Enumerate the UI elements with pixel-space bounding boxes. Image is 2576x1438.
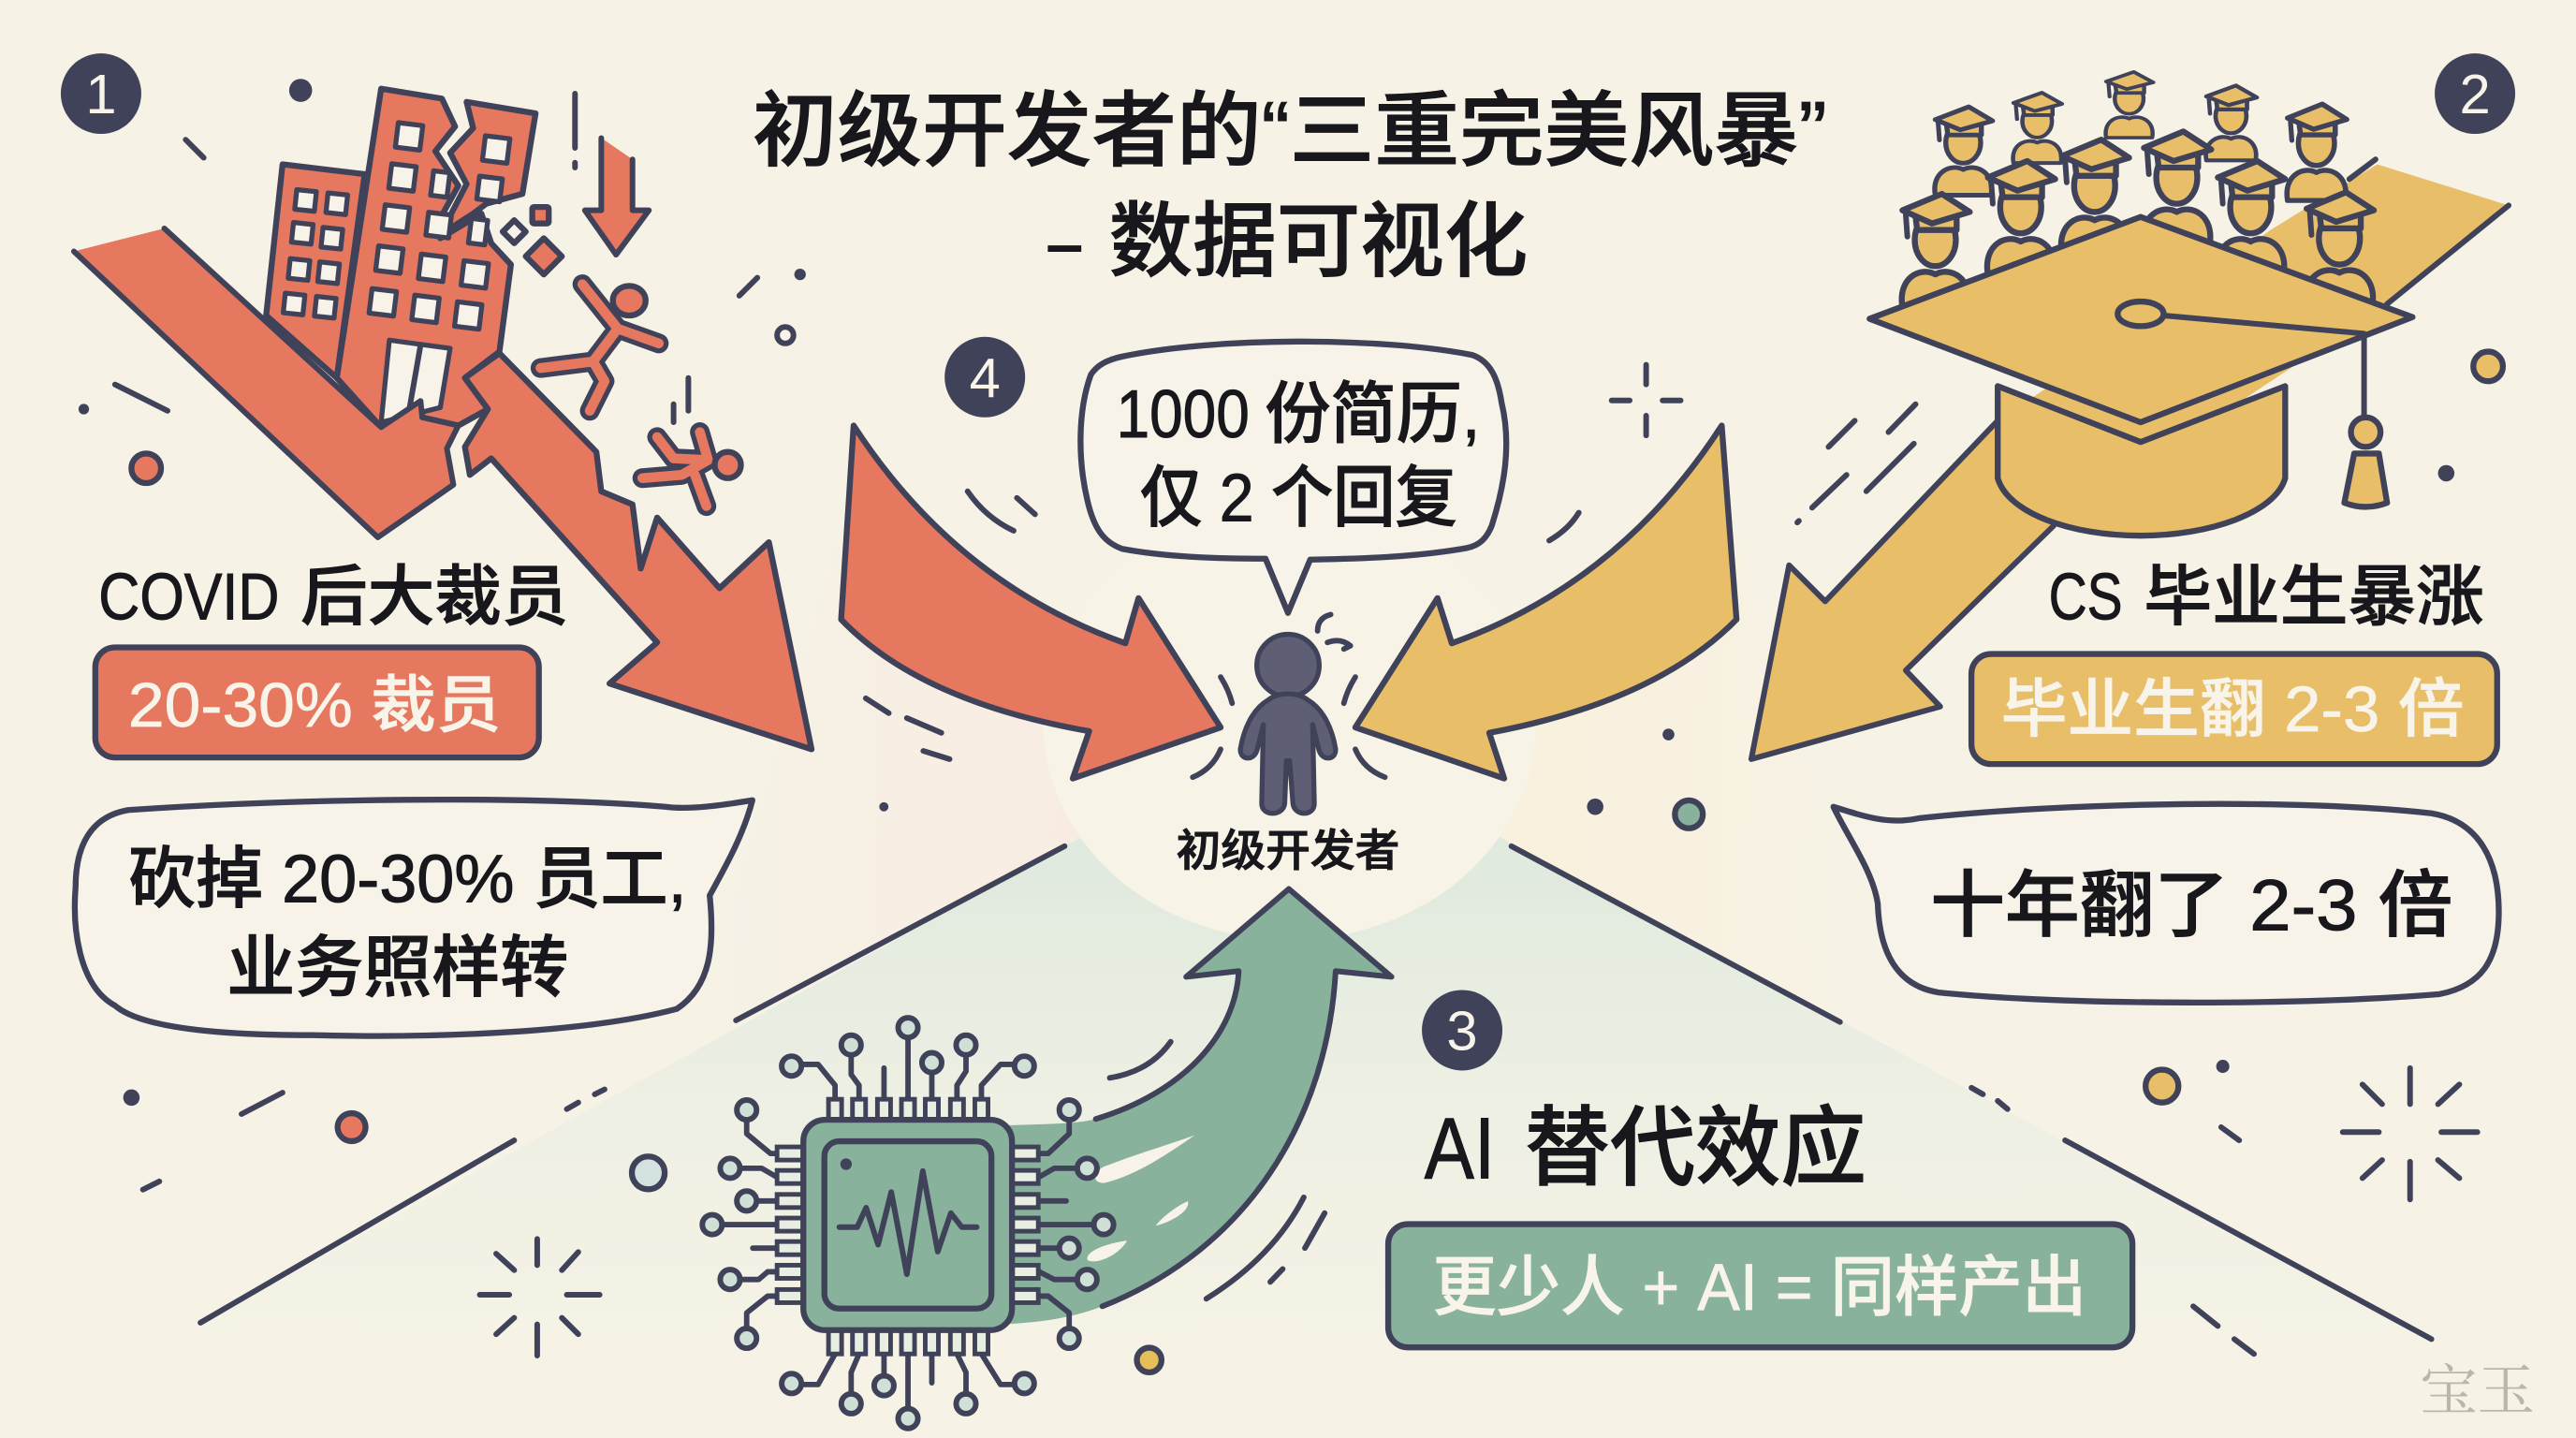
badge 4: 4 (970, 347, 1001, 410)
stat pill: graduates (1971, 654, 2497, 764)
speech bubble: layoffs: 业务照样转 (227, 931, 568, 1005)
decorative marks top right (1797, 352, 2503, 522)
cs heading: 毕业生暴涨 (2144, 560, 2484, 634)
icon: ai chip (702, 1018, 1114, 1429)
icon: graduation cap (1869, 217, 2412, 536)
covid heading: 后大裁员 (300, 560, 568, 634)
green wedge outline (200, 846, 2432, 1339)
speech bubble: layoffs: 砍掉 20-30% 员工, (128, 843, 687, 917)
icon: falling person two (642, 378, 741, 506)
stat pill: graduates: 毕业生翻 2-3 倍 (2001, 673, 2465, 745)
icon: yellow arrow behind cap (1751, 159, 2509, 759)
panel: ai replacement (702, 889, 2132, 1429)
ai heading: AI (1425, 1099, 1495, 1196)
stat pill: layoffs (95, 648, 539, 757)
speech bubble: resumes: 1000 (1117, 377, 1250, 452)
stat pill: ai output (1388, 1225, 2132, 1347)
arrow: red curved into person (842, 426, 1221, 779)
icon: falling person one (540, 285, 659, 411)
icon: down arrow (575, 94, 649, 255)
title: – (1048, 196, 1081, 287)
badge 1 (61, 53, 141, 134)
speech bubble: layoffs (75, 800, 753, 1036)
icon: junior developer figure (1193, 614, 1385, 814)
icon: debris (503, 207, 562, 274)
covid heading (98, 560, 568, 634)
badge 2: 2 (2459, 63, 2491, 125)
cs heading: CS (2049, 560, 2123, 634)
arrow: green rising (1003, 889, 1392, 1325)
decorative marks top left (79, 79, 806, 483)
title: 初级开发者的“三重完美风暴” (753, 85, 1827, 177)
icon: broken red arrow (74, 228, 812, 749)
ai heading: 替代效应 (1525, 1099, 1866, 1196)
title: 数据可视化 (1109, 196, 1528, 287)
covid heading: COVID (98, 560, 279, 634)
speech bubble: resumes: 份简历, (1265, 377, 1480, 452)
watermark: 宝玉 (2420, 1360, 2535, 1422)
icon: graduates crowd (1902, 72, 2374, 307)
icon: left building (266, 165, 365, 378)
speech bubble: resumes (1080, 342, 1506, 613)
icon: cracked tower (337, 89, 535, 427)
panel: cs graduates (1751, 53, 2515, 1003)
badge 2 (2435, 53, 2515, 134)
speech bubble: graduates (1834, 804, 2499, 1003)
label: junior developer: 初级开发者 (1177, 827, 1399, 876)
decorative marks centre (866, 365, 1703, 829)
badge 4 (944, 337, 1025, 418)
title (753, 85, 1827, 287)
badge 1: 1 (85, 63, 117, 125)
speech bubble: resumes: 仅 2 个回复 (1140, 461, 1457, 536)
stat pill: layoffs: 20-30% 裁员 (128, 671, 501, 741)
badge 3 (1422, 990, 1502, 1070)
decorative marks bottom right (2145, 1060, 2478, 1354)
stat pill: ai output: 更少人 + AI = 同样产出 (1432, 1250, 2086, 1324)
decorative marks bottom left (124, 1090, 1162, 1372)
panel: covid layoffs (61, 53, 812, 1036)
arrow: yellow curved into person (1355, 426, 1736, 779)
speech bubble: graduates: 十年翻了 2-3 倍 (1930, 865, 2452, 946)
badge 3: 3 (1446, 1000, 1478, 1063)
